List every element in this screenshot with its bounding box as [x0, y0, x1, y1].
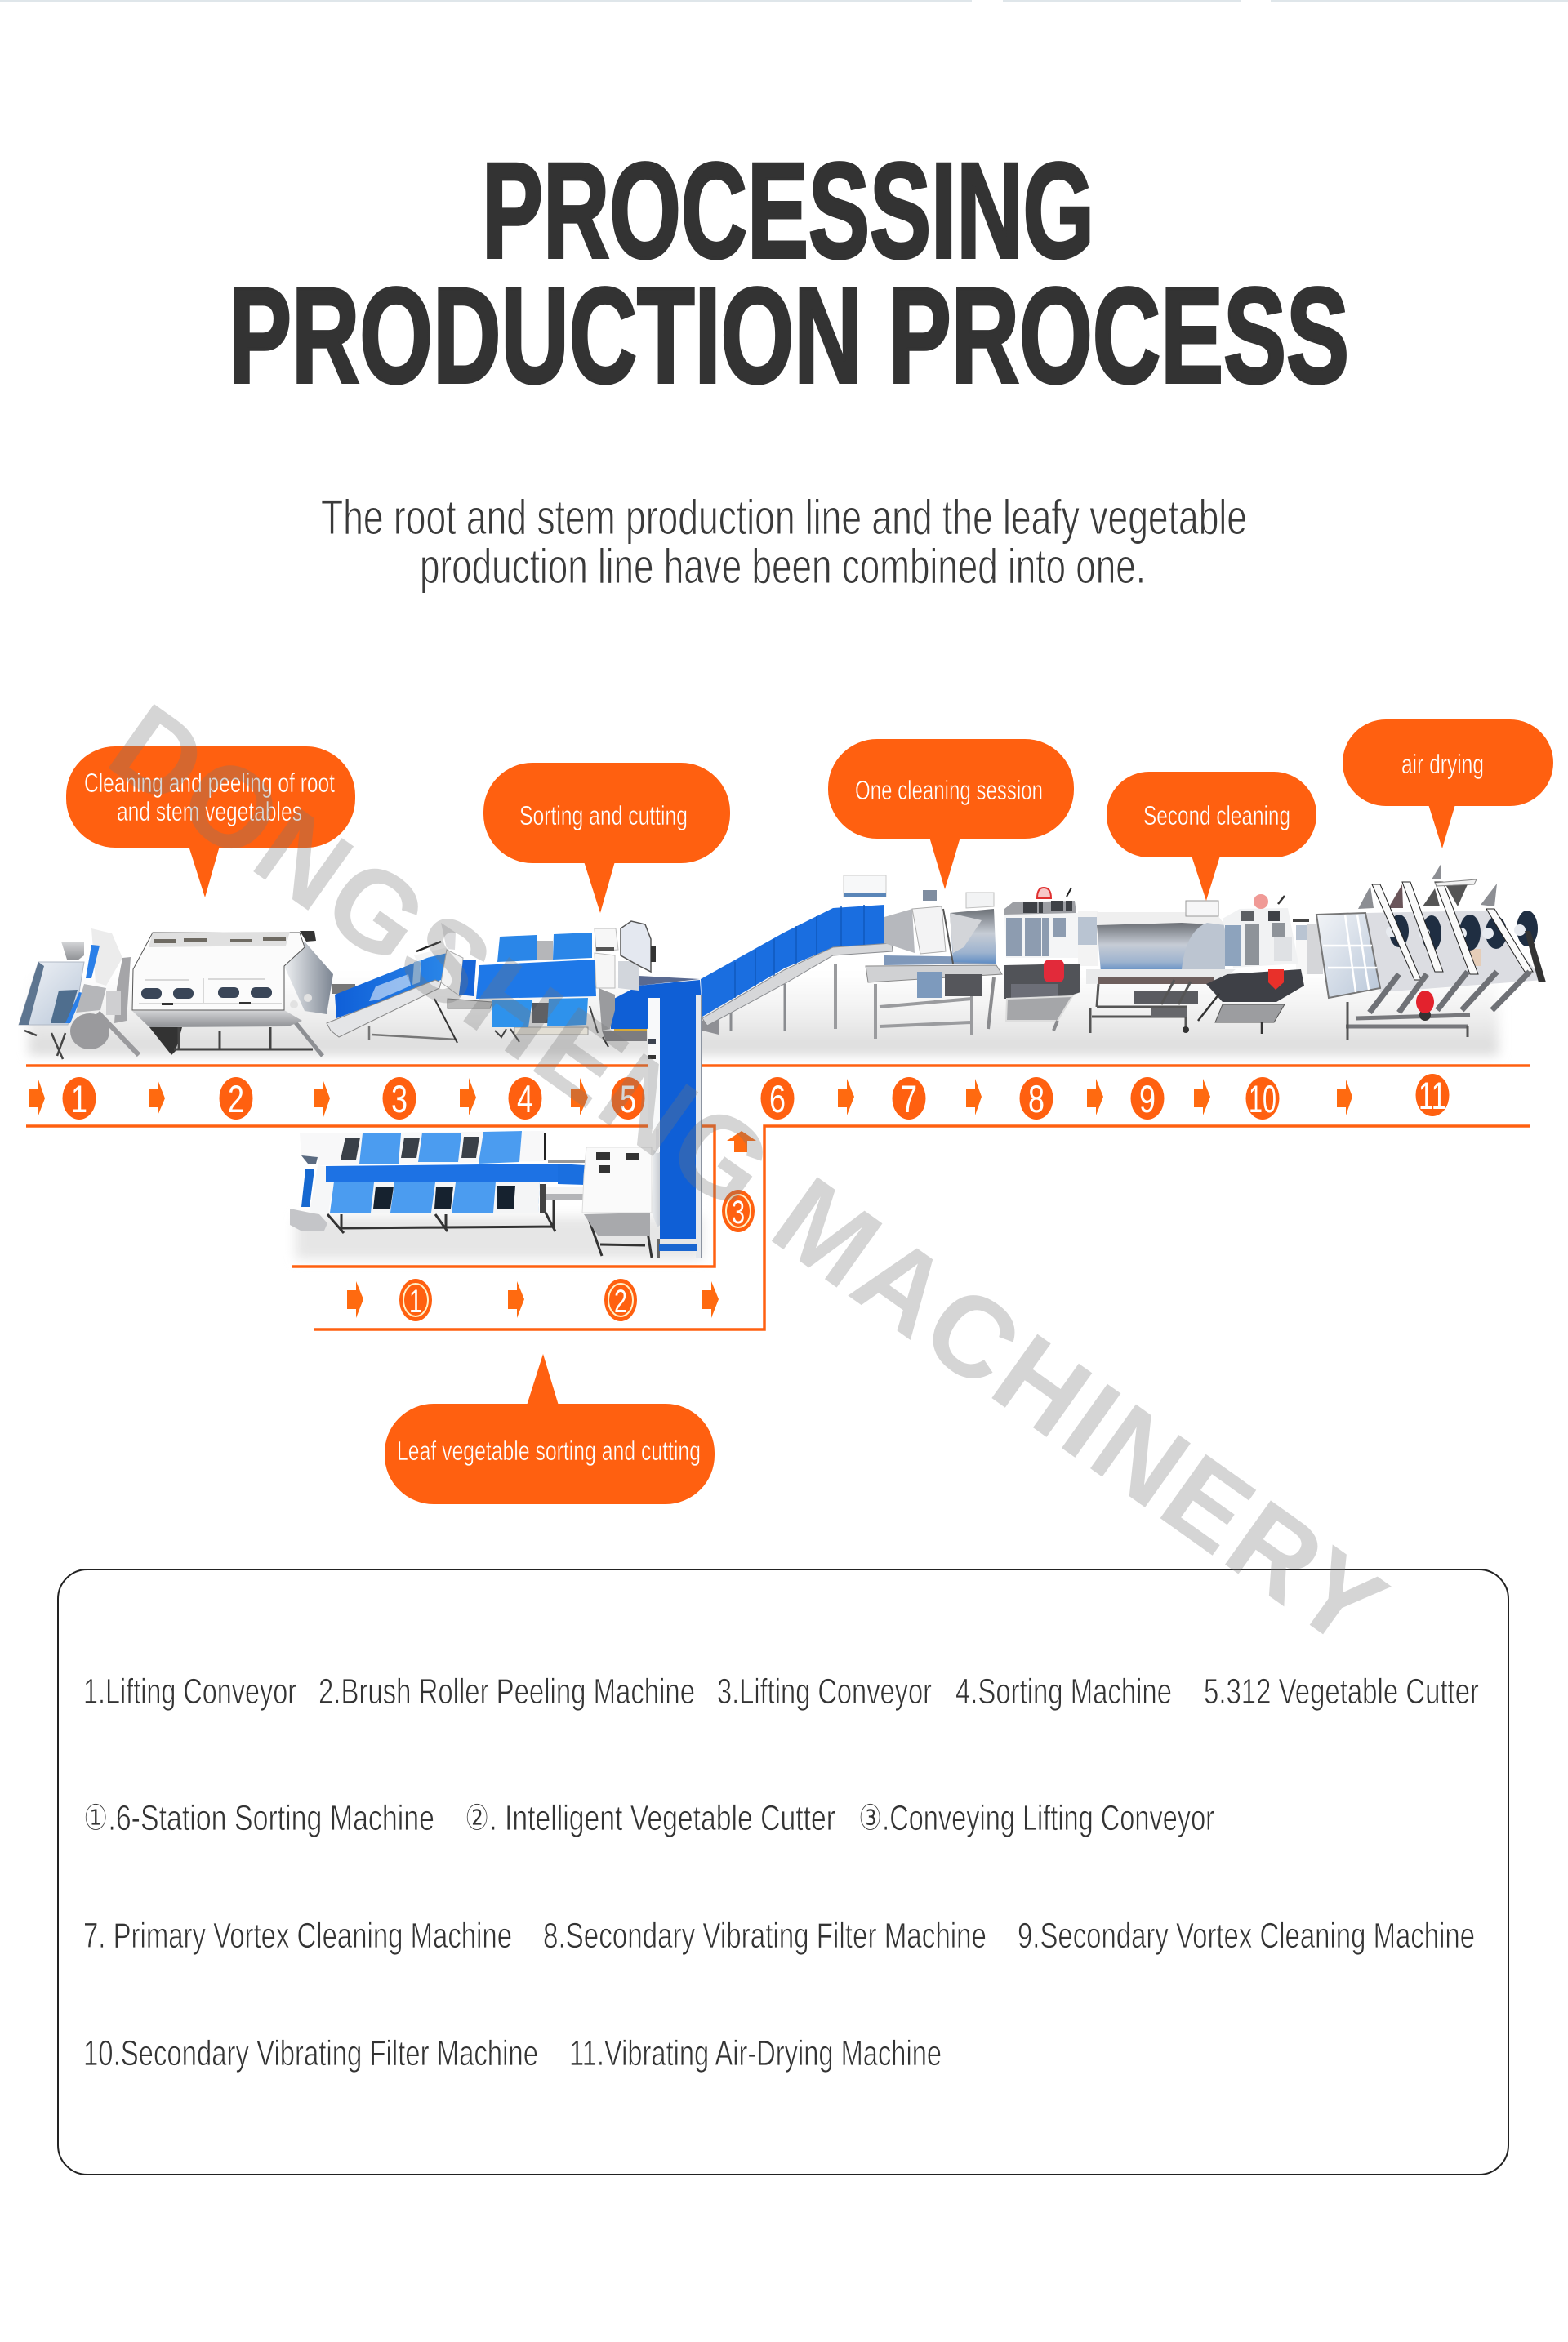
callout: second cleaning: Second cleaning [1143, 800, 1290, 830]
legend row 4: 11.Vibrating Air-Drying Machine [569, 2033, 942, 2073]
callout: one cleaning session [828, 739, 1074, 889]
numbered step markers main line [62, 1074, 1449, 1120]
numbered step markers main line: 10 [1249, 1077, 1276, 1120]
machine 8: secondary vibrating filter [988, 888, 1098, 1031]
legend row 2: ②. Intelligent Vegetable Cutter [465, 1798, 835, 1838]
flow arrows main line [29, 1078, 1352, 1117]
callout: cleaning and peeling [66, 746, 355, 897]
leaf line machine 2: intelligent vegetable cutter [582, 1147, 676, 1258]
numbered step markers leaf line: 2 [614, 1284, 627, 1320]
callout: cleaning and peeling: Cleaning and peeling of root [84, 768, 335, 798]
numbered step markers main line: 7 [901, 1077, 917, 1120]
machine 10: secondary vibrating filter [1198, 894, 1315, 1034]
leaf line machine 1: 6-station sorter [290, 1131, 586, 1233]
legend panel [58, 1569, 1508, 2175]
legend row 3 [83, 1916, 1475, 1956]
numbered step markers main line: 2 [228, 1077, 244, 1120]
legend row 2: ③.Conveying Lifting Conveyor [858, 1798, 1214, 1838]
callout: leaf vegetable sorting and cutting: Leaf vegetable sorting and cutting [397, 1436, 701, 1466]
numbered step markers main line: 8 [1028, 1077, 1045, 1120]
numbered step markers main line: 11 [1419, 1074, 1446, 1117]
subtitle [321, 490, 1247, 594]
machine 4: sorting machine [448, 933, 598, 1042]
legend row 3: 7. Primary Vortex Cleaning Machine [83, 1916, 512, 1956]
legend row 2: ①.6-Station Sorting Machine [83, 1798, 434, 1838]
numbered step markers main line: 4 [517, 1077, 533, 1120]
machine 2: brush roller peeler [132, 931, 333, 1056]
callout: second cleaning [1107, 772, 1316, 901]
legend row 1: 1.Lifting Conveyor [83, 1672, 296, 1712]
machine 9: secondary vortex cleaner [1086, 901, 1236, 1033]
callout: one cleaning session: One cleaning session [855, 775, 1043, 805]
legend row 1: 3.Lifting Conveyor [717, 1672, 932, 1712]
callout: sorting and cutting [483, 763, 730, 913]
subtitle: The root and stem production line and the leafy vegetable [321, 490, 1247, 545]
legend row 1 [83, 1672, 1479, 1712]
top edge stripe [0, 0, 1568, 2]
legend row 3: 8.Secondary Vibrating Filter Machine [543, 1916, 987, 1956]
numbered step markers main line: 3 [391, 1077, 408, 1120]
numbered step markers leaf line [399, 1190, 755, 1321]
legend row 1: 5.312 Vegetable Cutter [1204, 1672, 1479, 1712]
callout: cleaning and peeling: and stem vegetables [117, 796, 302, 826]
legend row 1: 4.Sorting Machine [956, 1672, 1172, 1712]
numbered step markers main line: 1 [71, 1077, 87, 1120]
machine 3: lifting conveyor [327, 923, 476, 1043]
machine 6: inclined belt conveyor [701, 905, 893, 1035]
machine 5: vegetable cutter [595, 921, 702, 1047]
vertical blue conveyor [648, 995, 702, 1258]
numbered step markers main line: 5 [620, 1077, 636, 1120]
callout: leaf vegetable sorting and cutting [385, 1354, 715, 1504]
title: PROCESSING [482, 136, 1094, 287]
machine 7: primary vortex cleaner [835, 875, 1002, 1039]
machine 11: vibrating air dryer [1307, 863, 1546, 1040]
machine 1: lifting conveyor [19, 928, 139, 1059]
watermark: DONGSHENG MACHINERY [88, 679, 1408, 1672]
title [229, 136, 1349, 412]
numbered step markers main line: 6 [769, 1077, 786, 1120]
callout: air drying [1343, 719, 1553, 848]
flow arrows leaf line [347, 1131, 756, 1318]
numbered step markers main line: 9 [1139, 1077, 1156, 1120]
flow lines [26, 1066, 1530, 1329]
legend row 4: 10.Secondary Vibrating Filter Machine [83, 2033, 538, 2073]
callout: sorting and cutting: Sorting and cutting [519, 800, 688, 830]
legend row 2 [83, 1798, 1214, 1838]
legend row 1: 2.Brush Roller Peeling Machine [318, 1672, 695, 1712]
subtitle: production line have been combined into one. [420, 539, 1146, 594]
callout: air drying: air drying [1401, 749, 1484, 779]
numbered step markers leaf line: 1 [409, 1284, 422, 1320]
ground shadow [29, 972, 1499, 1259]
numbered step markers leaf line: 3 [732, 1195, 745, 1231]
